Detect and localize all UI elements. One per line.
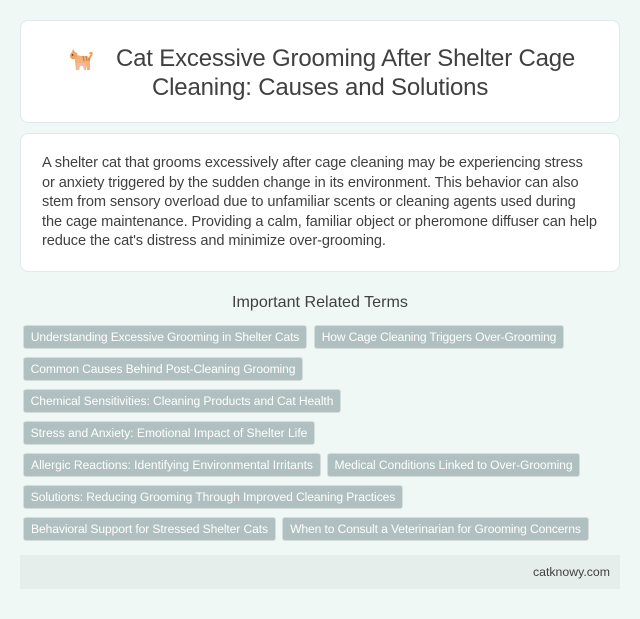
- tag: Medical Conditions Linked to Over-Grooming: [335, 458, 572, 472]
- tag: Chemical Sensitivities: Cleaning Products and Cat Health: [31, 394, 333, 408]
- tag: When to Consult a Veterinarian for Grooming Concerns: [290, 522, 581, 536]
- tag: Allergic Reactions: Identifying Environmental Irritants: [31, 458, 313, 472]
- icon: cat: [70, 49, 93, 70]
- tag: Stress and Anxiety: Emotional Impact of Shelter Life: [31, 426, 307, 440]
- tag: [23, 485, 403, 509]
- description text: [42, 155, 597, 249]
- description text: stem from sensory overload due to unfamiliar scents or cleaning agents used during: [42, 194, 576, 210]
- heading: related terms: Important Related Terms: [232, 293, 408, 311]
- tag: [23, 325, 307, 349]
- tag: Behavioral Support for Stressed Shelter Cats: [31, 522, 268, 536]
- heading line 2: Cleaning: Causes and Solutions: [152, 74, 488, 101]
- tag: [23, 453, 321, 477]
- description text: reduce the cat's distress and minimize over-grooming.: [42, 233, 386, 249]
- panel: title card: [20, 20, 620, 123]
- tags: related terms: [23, 325, 589, 541]
- tag: Common Causes Behind Post-Cleaning Grooming: [31, 362, 295, 376]
- tag: [23, 421, 315, 445]
- tag: How Cage Cleaning Triggers Over-Grooming: [322, 330, 556, 344]
- footer site name: catknowy.com: [533, 565, 610, 579]
- tag: [314, 325, 564, 349]
- panel: description card: [20, 133, 620, 272]
- tag: Understanding Excessive Grooming in Shelter Cats: [31, 330, 299, 344]
- description text: the cage maintenance. Providing a calm, familiar object or pheromone diffuser can help: [42, 214, 597, 230]
- footer bar: [20, 555, 620, 589]
- tag: [23, 389, 341, 413]
- heading line 1: Cat Excessive Grooming After Shelter Cage: [116, 45, 575, 72]
- tag: [282, 517, 589, 541]
- tag: Solutions: Reducing Grooming Through Improved Cleaning Practices: [31, 490, 395, 504]
- tag: [327, 453, 580, 477]
- description text: A shelter cat that grooms excessively after cage cleaning may be experiencing stress: [42, 155, 583, 171]
- tag: [23, 357, 303, 381]
- tag: [23, 517, 276, 541]
- description text: or anxiety triggered by the sudden change in its environment. This behavior can also: [42, 175, 578, 191]
